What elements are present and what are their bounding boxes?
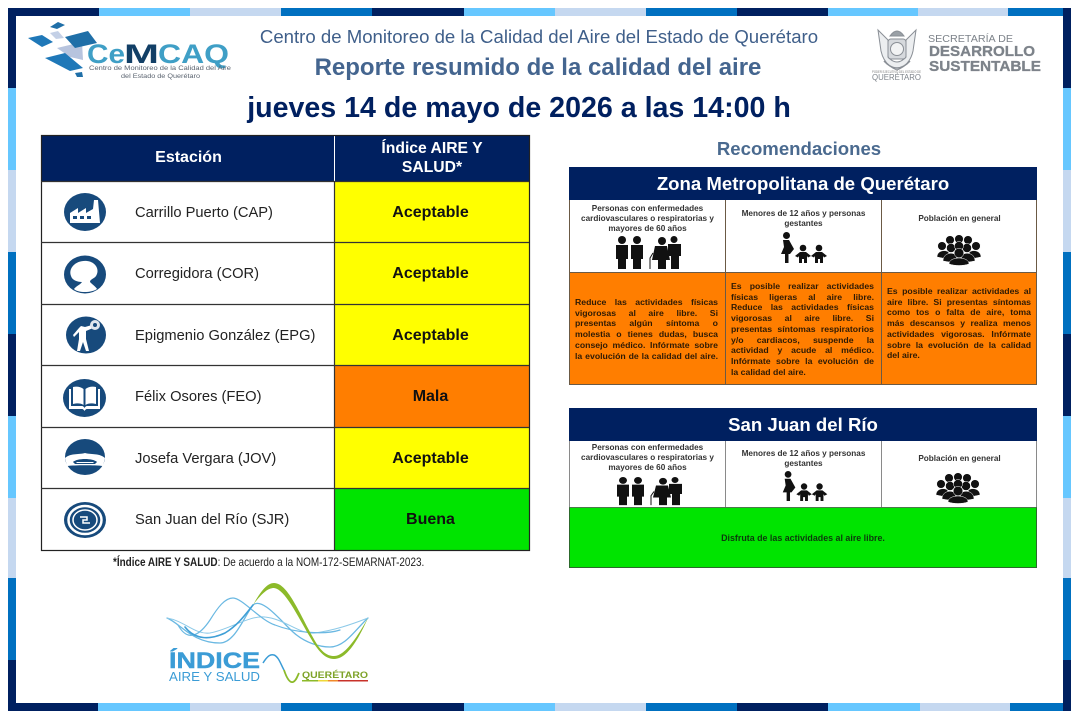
audience label: general: Población en general [918,214,1001,223]
recommendation text: minors and pregnant: vigorosas al aire libre. Si [731,313,874,323]
recommendation text: minors and pregnant: presentas síntomas respiratorios [731,324,874,334]
logo: CeMCAQ [28,22,231,80]
cell grid [569,441,1037,507]
audience label: general: Población en general [918,454,1001,463]
logo: CeMCAQ: M [124,39,159,69]
header date: jueves 14 de mayo de 2026 a las 14:00 h [247,92,791,124]
audience label: at-risk adults [581,204,714,233]
audience label: at-risk adults: mayores de 60 años [608,224,687,233]
logo: Índice Aire y Salud [166,583,369,684]
zone title: San Juan del Río [569,408,1037,441]
audience label: minors and pregnant: gestantes [784,459,823,468]
green body with message [569,507,1037,568]
recommendation text: at-risk adults: la evolución de la calidad del aire. [575,351,718,361]
audience label: at-risk adults: Personas con enfermedades [592,443,703,452]
audience label: minors and pregnant [742,449,866,468]
orange body background [569,272,1037,385]
station name: Félix Osores: Félix Osores (FEO) [135,389,262,405]
panel: station table [40,134,530,552]
table header: index: Índice AIRE Y [381,140,483,157]
level cell: Epigmenio González [334,304,529,365]
icon: crowd [936,473,980,504]
logo: Índice Aire y Salud: ÍNDICE [169,648,260,673]
recommendation text: minors and pregnant: Infórmate sobre la evolución de [731,356,874,366]
audience label: at-risk adults [581,443,714,472]
station icon: factory [64,193,106,231]
footnote: *Índice AIRE Y SALUD: De acuerdo a la NOM-172-SEMARNAT-2023. [113,555,424,569]
station level: San Juan del Río: Buena [406,511,455,528]
recommendation text: at-risk adults [575,297,718,361]
station icon: stadium [65,439,105,475]
zone title: Zona Metropolitana: Zona Metropolitana de Querétaro [657,173,949,194]
logo: Secretaría de Desarrollo Sustentable [872,28,1041,82]
recommendation text: general population: más descansos y realiza menos [887,318,1031,328]
recommendation text: at-risk adults: presentas algún síntoma o [575,318,718,328]
audience label: minors and pregnant: gestantes [784,219,823,228]
recommendation text: general population: aire libre. Si presentas síntomas [887,297,1031,307]
recommendation text: general population [887,286,1031,360]
station name: Carrillo Puerto: Carrillo Puerto (CAP) [135,205,273,221]
recommendation text: minors and pregnant: actividad y acude al médico. [731,345,874,355]
header title: centre name: Centro de Monitoreo de la Calidad del Aire del Estado de Querétaro [260,26,818,47]
station name: Josefa Vergara: Josefa Vergara (JOV) [135,451,276,467]
station name: Corregidora: Corregidora (COR) [135,266,259,282]
table grid lines [40,134,530,552]
audience label: at-risk adults: cardiovasculares o respiratorias y [581,453,714,462]
level cell: Félix Osores [334,365,529,427]
level cell: San Juan del Río [334,488,529,550]
logo: Secretaría de Desarrollo Sustentable: PODER EJECUTIVO DEL ESTADO DE [872,70,922,74]
audience label: minors and pregnant [742,209,866,228]
green body with message: Disfruta de las actividades al aire libre. [721,533,885,543]
icon: crowd [937,235,981,266]
panel: Zona Metropolitana de Querétaro [569,167,1037,385]
recommendation text: at-risk adults: consejo médico. Infórmate sobre [575,340,718,350]
audience label: minors and pregnant: Menores de 12 años y personas [742,209,865,218]
table header: index: SALUD* [402,158,462,176]
table header: index [334,135,529,181]
station level: Félix Osores: Mala [413,388,448,405]
station icon: Corregidora bust [64,256,106,294]
station level: Carrillo Puerto: Aceptable [392,204,469,221]
level cell: Carrillo Puerto [334,181,529,242]
logo: Índice Aire y Salud: AIRE Y SALUD [169,669,260,684]
logo: Secretaría de Desarrollo Sustentable: DESARROLLO [929,44,1035,60]
header subtitle: report name: Reporte resumido de la calidad del aire [315,54,761,81]
recommendation text: at-risk adults: vigorosas al aire libre. Si [575,308,718,318]
station name: Epigmenio González: Epigmenio González (EPG) [135,328,315,344]
recommendation text: minors and pregnant: Reduce las actividades físicas [731,302,874,312]
icon: at-risk adults [617,477,682,506]
recommendation text: general population: como tos o falta de aire, toma [887,307,1031,317]
recommendation text: minors and pregnant: la calidad del aire. [731,367,806,377]
recommendation text: general population: sobre la evolución de la calidad [887,340,1031,350]
recommendation text: minors and pregnant: físicas ligeras al aire libre. [731,292,874,302]
logo: CeMCAQ: Ce [87,39,125,69]
table header: station [42,135,335,181]
icon: pregnant and children [782,471,828,501]
station icon: San Juan del Río emblem [64,502,106,538]
heading: Recomendaciones: Recomendaciones [717,138,881,159]
logo: CeMCAQ: CAQ [158,39,229,69]
logo: Secretaría de Desarrollo Sustentable: SUSTENTABLE [929,59,1041,75]
level cell: Corregidora [334,242,529,304]
recommendation text: minors and pregnant: Es posible realizar actividades [731,281,874,291]
station level: Epigmenio González: Aceptable [392,327,469,344]
recommendation text: general population: del aire. [887,350,920,360]
station level: Corregidora: Aceptable [392,265,469,282]
logo: Índice Aire y Salud: QUERÉTARO [302,670,368,681]
audience label: minors and pregnant: Menores de 12 años y personas [742,449,865,458]
panel: San Juan del Río [569,408,1037,568]
recommendation text: at-risk adults: Reduce las actividades físicas [575,297,718,307]
logo: CeMCAQ: del Estado de Querétaro [121,73,200,80]
zone title: Zona Metropolitana [569,167,1037,200]
logo: Secretaría de Desarrollo Sustentable: SECRETARÍA DE [928,32,1013,45]
recommendation text: minors and pregnant: y/o cardiacos, suspende la [731,335,874,345]
recommendation text: minors and pregnant [731,281,874,377]
recommendation text: at-risk adults: molestia o tienes dudas, busca [575,329,718,339]
audience label: at-risk adults: mayores de 60 años [608,463,687,472]
audience label: at-risk adults: cardiovasculares o respiratorias y [581,214,714,223]
station icon: open book [63,379,106,417]
station icon: Epigmenio statue [66,316,106,354]
audience label: at-risk adults: Personas con enfermedades [592,204,703,213]
zone title: San Juan del Río: San Juan del Río [728,414,878,435]
logo: CeMCAQ: Centro de Monitoreo de la Calidad del Aire [89,65,231,72]
table header: station: Estación [155,149,222,166]
icon: at-risk adults [616,236,681,269]
level cell: Josefa Vergara [334,427,529,488]
cell grid [569,200,1037,385]
logo: Secretaría de Desarrollo Sustentable: QUERÉTARO [872,72,921,82]
icon: pregnant and children [781,232,827,263]
station name: San Juan del Río: San Juan del Río (SJR) [135,512,289,528]
recommendation text: general population: actividades vigorosas. Infórmate [887,329,1031,339]
recommendation text: general population: Es posible realizar actividades al [887,286,1031,296]
station level: Josefa Vergara: Aceptable [392,450,469,467]
